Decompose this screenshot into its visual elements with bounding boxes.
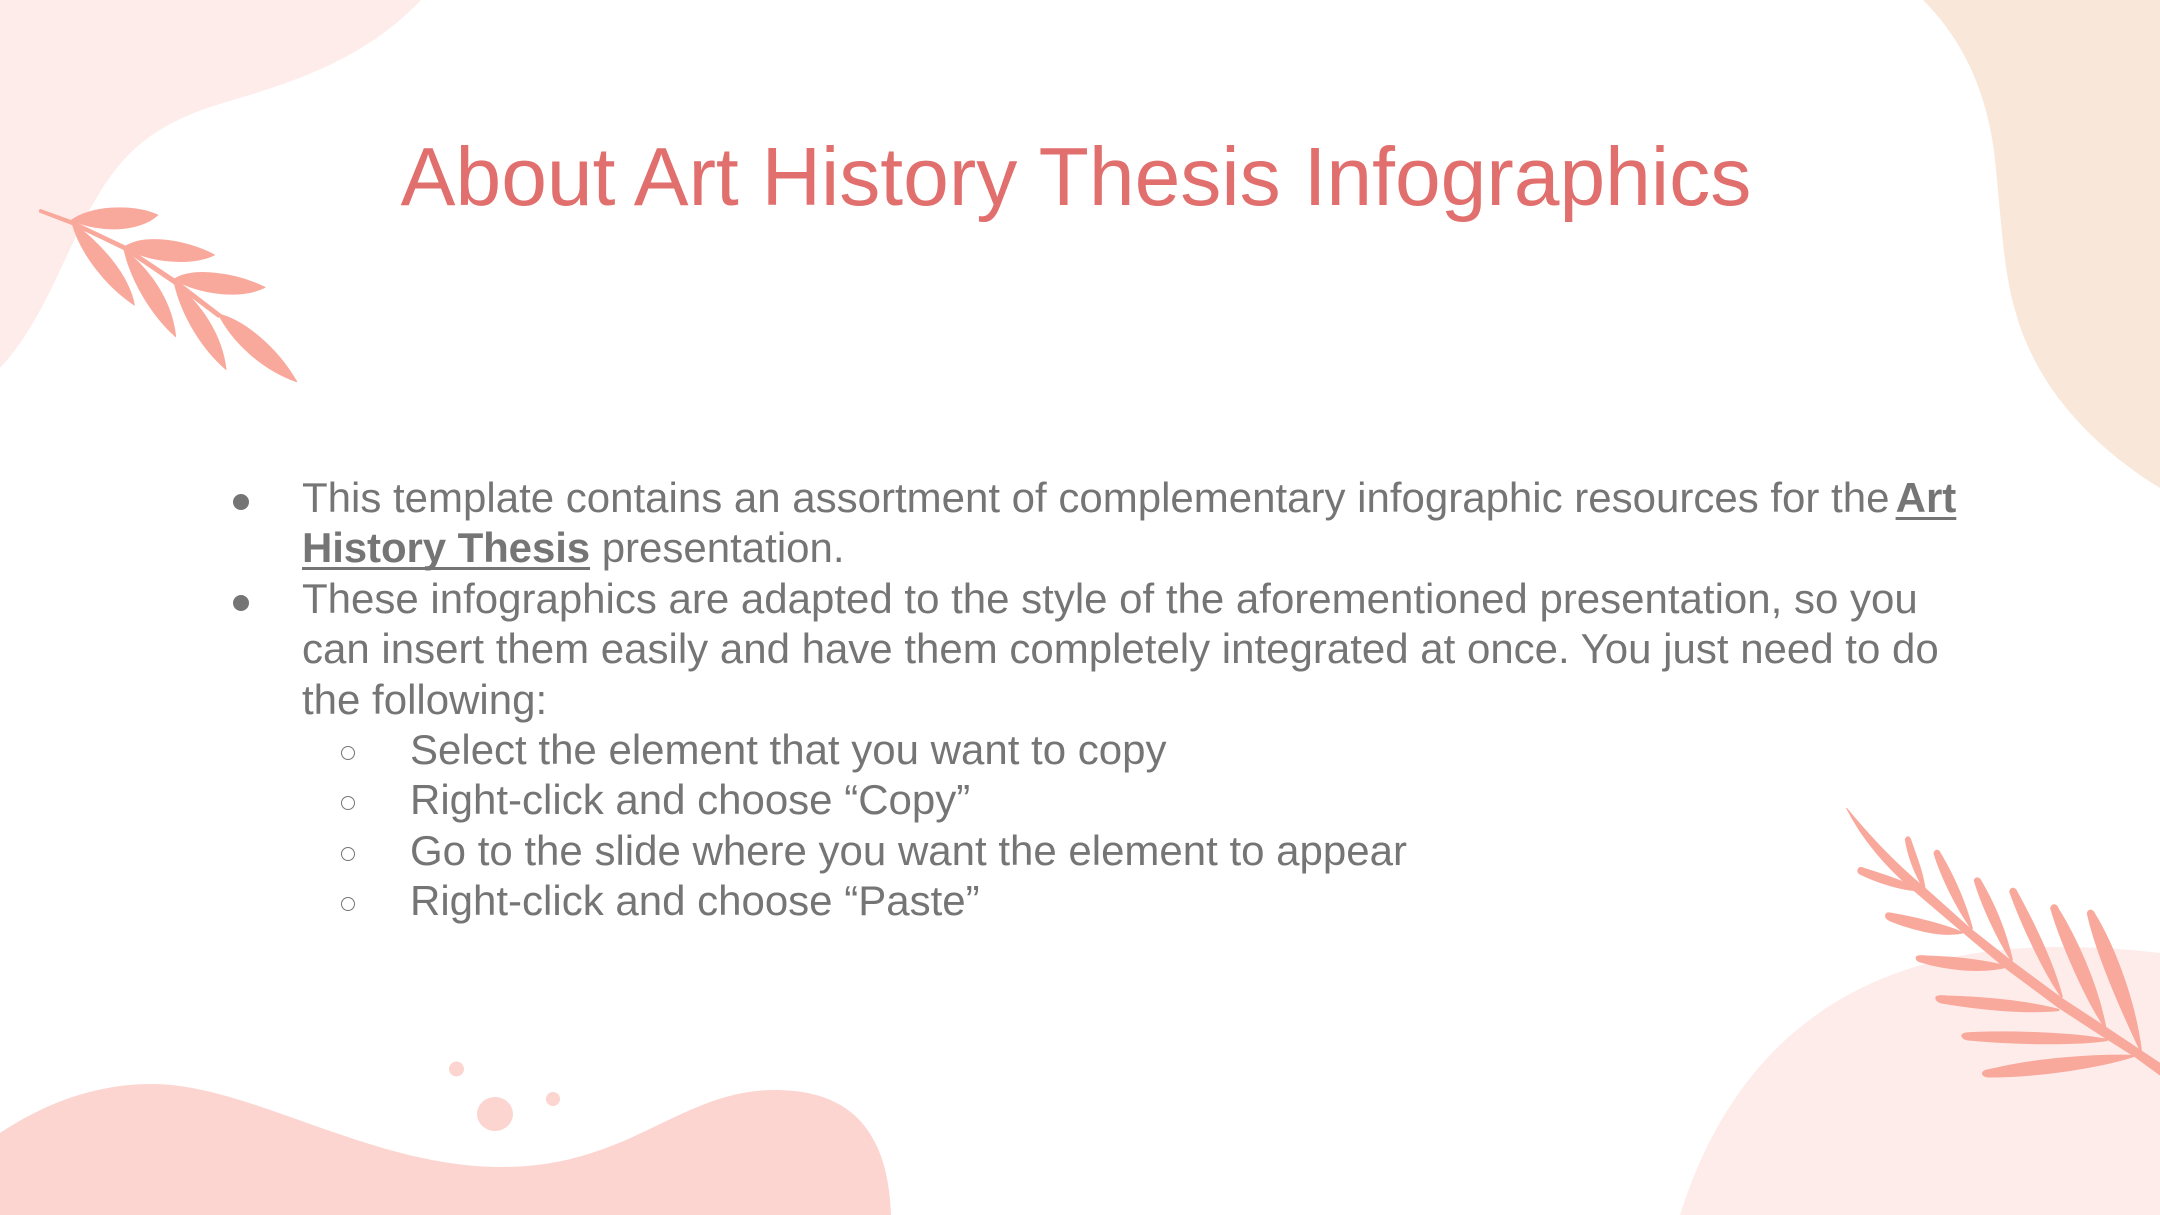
blob: bottom wave bbox=[0, 1084, 891, 1215]
bullet 2 line 2: can insert them easily and have them completely integrated at once. You just need to do bbox=[302, 625, 1939, 672]
sub-bullet marker 1 bbox=[341, 746, 355, 760]
dots above wave bbox=[449, 1062, 560, 1131]
sub-bullet 2: Right-click and choose “Copy” bbox=[410, 776, 970, 823]
bullet 1 line 2: History Thesis presentation. bbox=[302, 524, 845, 571]
blob: bottom right bbox=[1680, 947, 2160, 1215]
blob: top right bbox=[1923, 0, 2160, 488]
leaf branch: bottom right bbox=[1847, 808, 2160, 1076]
bullet 1 line 1: This template contains an assortment of complementary infographic resources for the Art bbox=[302, 474, 1956, 521]
title: About Art History Thesis Infographics bbox=[401, 132, 1751, 223]
bullet 2 line 3: the following: bbox=[302, 676, 547, 723]
sub-bullet 1: Select the element that you want to copy bbox=[410, 726, 1166, 773]
blob: top left bbox=[0, 0, 421, 368]
sub-bullet marker 3 bbox=[341, 847, 355, 861]
sub-bullet marker 2 bbox=[341, 796, 355, 810]
sub-bullet 4: Right-click and choose “Paste” bbox=[410, 877, 980, 924]
sub-bullet marker 4 bbox=[341, 897, 355, 911]
body text: bullet list bbox=[233, 474, 1956, 924]
bullet marker 1 bbox=[233, 494, 249, 510]
sub-bullet 3: Go to the slide where you want the element to appear bbox=[410, 827, 1407, 874]
leaf branch: top left bbox=[39, 208, 297, 382]
bullet 2 line 1: These infographics are adapted to the style of the aforementioned presentation, so you bbox=[302, 575, 1918, 622]
bullet marker 2 bbox=[233, 595, 249, 611]
